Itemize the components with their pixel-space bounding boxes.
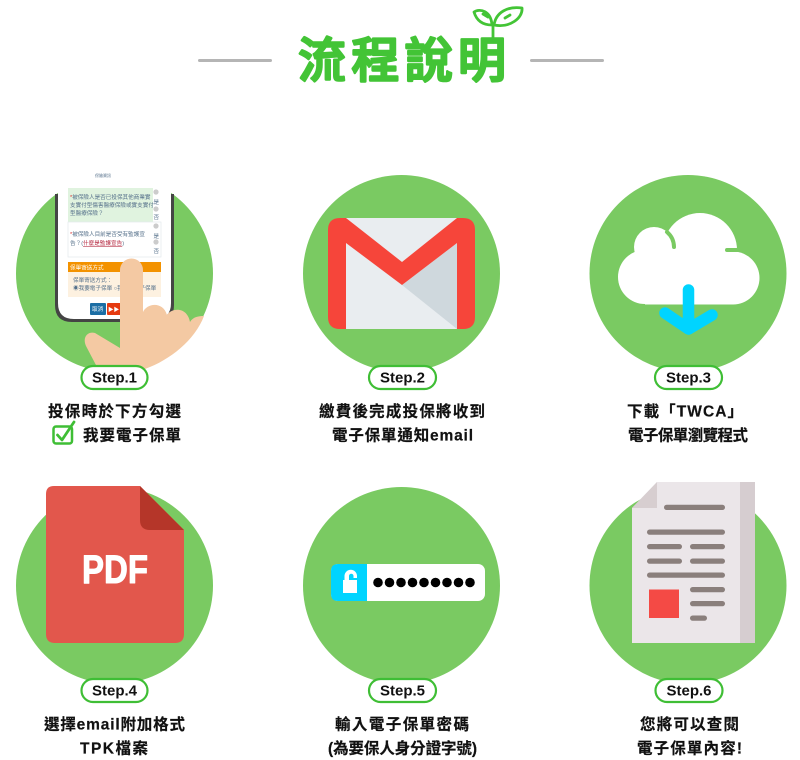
step text — [637, 714, 742, 758]
icon: green circle — [303, 175, 500, 372]
icon: phone with form screen: *被保險人是否已投保其他商業實 — [70, 193, 151, 201]
password dots — [373, 578, 475, 587]
step text — [328, 714, 477, 758]
step text: 輸入電子保單密碼 — [335, 714, 469, 734]
icon: phone with form screen: 保險資訊 — [95, 172, 111, 178]
step badge: Step.2 — [380, 370, 425, 386]
icon: phone with form screen: 否 — [154, 214, 160, 221]
step text — [319, 402, 485, 444]
icon: phone with form screen: 支實付型傷害醫療保險或實支實付 — [70, 201, 154, 209]
step text: 投保時於下方勾選 — [48, 402, 181, 420]
icon: checked checkbox — [54, 422, 74, 444]
icon: PDF file — [46, 486, 184, 643]
icon: phone with form screen: 取消 — [92, 305, 104, 313]
step text — [627, 402, 748, 444]
title with sprout — [198, 8, 604, 91]
icon: gmail envelope — [328, 218, 475, 329]
icon: phone with form screen: 型醫療保險？ — [70, 209, 104, 217]
icon: green circle — [303, 487, 500, 684]
icon: phone with form screen: *被保險人目前是否受有監護宣 — [70, 230, 145, 238]
step badge — [656, 679, 722, 702]
step badge: Step.1 — [92, 370, 137, 386]
icon: cloud — [618, 213, 760, 304]
icon: phone with form screen: 是 — [154, 233, 160, 240]
step 4: panel — [16, 486, 213, 758]
icon: phone with form screen: 否 — [154, 248, 160, 255]
step 6: panel — [590, 482, 786, 758]
step badge: Step.4 — [92, 682, 138, 700]
icon: green circle — [590, 175, 786, 372]
icon: phone with form screen: 告？(什麼是監護宣告) — [70, 239, 124, 247]
icon: green circle — [16, 487, 213, 684]
step text: 電子保單通知email — [332, 426, 473, 444]
step text: 我要電子保單 — [83, 426, 181, 444]
step 5: panel — [303, 487, 500, 758]
icon: PDF file: PDF — [82, 548, 148, 592]
step badge: Step.3 — [666, 370, 711, 386]
icon: phone with form screen — [55, 172, 174, 322]
icon: green circle — [590, 487, 786, 684]
icon: pointing hand — [85, 258, 204, 369]
step badge — [82, 679, 148, 702]
icon: password field — [331, 564, 485, 601]
step 3: panel — [590, 175, 786, 444]
step badge — [369, 679, 436, 702]
step text: 選擇email附加格式 — [44, 714, 185, 734]
icon: green circle — [16, 175, 213, 372]
step text: 電子保單內容! — [637, 738, 742, 758]
icon: phone with form screen: ▶▶ — [108, 306, 120, 314]
step badge — [655, 366, 722, 389]
step 2: panel — [303, 175, 500, 444]
icon: phone with form screen: 保單寄送方式： — [73, 276, 112, 284]
icon: open padlock — [343, 570, 357, 593]
title with sprout: 流程說明 — [298, 21, 506, 91]
step text: 繳費後完成投保將收到 — [319, 402, 485, 420]
step text: 您將可以查閱 — [640, 714, 739, 734]
step badge — [82, 366, 148, 389]
step badge — [369, 366, 436, 389]
step text: 電子保單瀏覽程式 — [628, 426, 748, 444]
step text — [48, 402, 181, 444]
icon: phone with form screen: ◉我要電子保單 ○我不要電子保單 — [73, 284, 157, 292]
icon: download arrow — [665, 290, 712, 329]
step badge: Step.5 — [380, 682, 425, 700]
icon: document — [632, 482, 755, 643]
step text: TPK檔案 — [80, 738, 148, 758]
step text: 下載「TWCA」 — [627, 402, 743, 420]
icon: phone with form screen: 是 — [154, 199, 160, 206]
icon: phone with form screen: 保單寄送方式 — [70, 264, 104, 272]
step text: (為要保人身分證字號) — [328, 738, 477, 758]
step badge: Step.6 — [666, 682, 712, 700]
step 1: panel — [16, 172, 213, 444]
step text — [44, 714, 185, 758]
